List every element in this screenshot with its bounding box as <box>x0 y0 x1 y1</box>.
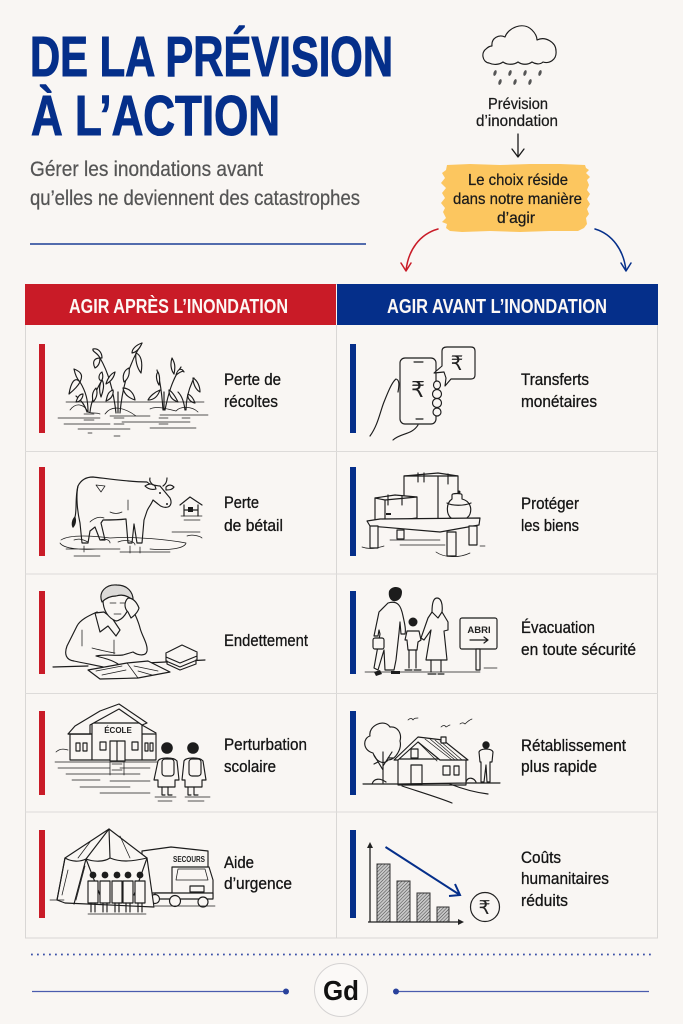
icon: phone with rupee payment: ₹ <box>451 351 463 375</box>
panel: comparison table <box>25 284 658 938</box>
row: safe evacuation <box>350 587 497 676</box>
row: livestock loss <box>39 467 202 556</box>
labels: before-flood actions: les biens <box>521 517 579 535</box>
row: crop loss <box>39 343 208 436</box>
row: cash transfers <box>350 344 475 440</box>
labels: before-flood actions: Protéger <box>521 495 579 513</box>
labels: before-flood actions: réduits <box>521 892 568 910</box>
icon: worried man with papers <box>53 585 205 679</box>
row: faster recovery <box>350 711 500 803</box>
icon: cow in floodwater <box>60 477 202 556</box>
row: lower humanitarian costs <box>350 830 500 925</box>
row: debt <box>39 585 205 679</box>
arrow: forecast to choice <box>512 134 524 157</box>
arrow: red branch <box>401 229 438 271</box>
logo: Gd <box>323 975 359 1006</box>
title <box>30 25 393 148</box>
labels: after-flood impacts: Endettement <box>224 632 308 650</box>
labels: before-flood actions: en toute sécurité <box>521 641 636 659</box>
row: school disruption <box>39 704 210 801</box>
icon: rain cloud <box>483 26 556 85</box>
icon: flooded school and children: ÉCOLE <box>104 726 132 735</box>
subtitle: Gérer les inondations avant <box>30 158 263 181</box>
footer right line <box>393 988 649 994</box>
labels: before-flood actions: Transferts <box>521 371 589 389</box>
row: protect belongings <box>350 467 485 557</box>
labels: after-flood impacts: Perte <box>224 494 259 512</box>
icon: relief tent and truck: SECOURS <box>173 855 206 864</box>
title: DE LA PRÉVISION <box>30 25 393 89</box>
forecast label: Prévision <box>488 96 548 113</box>
icon: goods raised on a table <box>362 473 485 557</box>
header: act before flood <box>337 284 658 325</box>
icon: house, tree and person <box>363 718 500 803</box>
callout: choice: dans notre manière <box>453 191 582 208</box>
labels: before-flood actions: Rétablissement <box>521 737 626 755</box>
labels: after-flood impacts <box>224 371 308 893</box>
footer left line <box>32 988 289 994</box>
title rule <box>30 243 366 245</box>
subtitle: qu’elles ne deviennent des catastrophes <box>30 187 360 210</box>
labels: before-flood actions <box>521 371 636 910</box>
header: act after flood: AGIR APRÈS L’INONDATION <box>69 295 288 318</box>
callout: choice <box>441 164 590 232</box>
icon: relief tent and truck <box>50 829 215 914</box>
labels: before-flood actions: monétaires <box>521 393 597 411</box>
labels: after-flood impacts: récoltes <box>224 393 278 411</box>
labels: after-flood impacts: Perte de <box>224 371 281 389</box>
icon: falling cost bar chart <box>367 842 500 925</box>
header: act before flood: AGIR AVANT L’INONDATION <box>387 295 607 318</box>
title: À L’ACTION <box>31 84 280 148</box>
labels: after-flood impacts: scolaire <box>224 758 276 776</box>
labels: after-flood impacts: Aide <box>224 854 254 872</box>
logo <box>314 964 368 1016</box>
labels: after-flood impacts: Perturbation <box>224 736 307 754</box>
labels: before-flood actions: Coûts <box>521 849 561 867</box>
labels: before-flood actions: humanitaires <box>521 870 609 888</box>
arrow: blue branch <box>595 229 631 271</box>
icon: family walking to shelter <box>365 587 497 676</box>
labels: after-flood impacts: de bétail <box>224 517 283 535</box>
footer dotted line <box>31 954 652 956</box>
icon: falling cost bar chart: ₹ <box>478 897 491 919</box>
labels: before-flood actions: Évacuation <box>521 618 595 637</box>
forecast label: d’inondation <box>476 113 558 130</box>
forecast label <box>476 96 558 130</box>
labels: after-flood impacts: d’urgence <box>224 875 292 893</box>
labels: before-flood actions: plus rapide <box>521 758 597 776</box>
header: act after flood <box>25 284 336 325</box>
callout: choice: d’agir <box>497 210 536 227</box>
subtitle <box>30 158 360 210</box>
icon: phone with rupee payment: ₹ <box>411 378 425 403</box>
callout: choice: Le choix réside <box>468 172 568 189</box>
icon: flooded rice plants <box>58 343 208 436</box>
icon: family walking to shelter: ABRI <box>467 625 491 636</box>
icon: phone with rupee payment <box>370 347 475 440</box>
icon: flooded school and children <box>55 704 210 801</box>
row: emergency aid <box>39 829 215 918</box>
